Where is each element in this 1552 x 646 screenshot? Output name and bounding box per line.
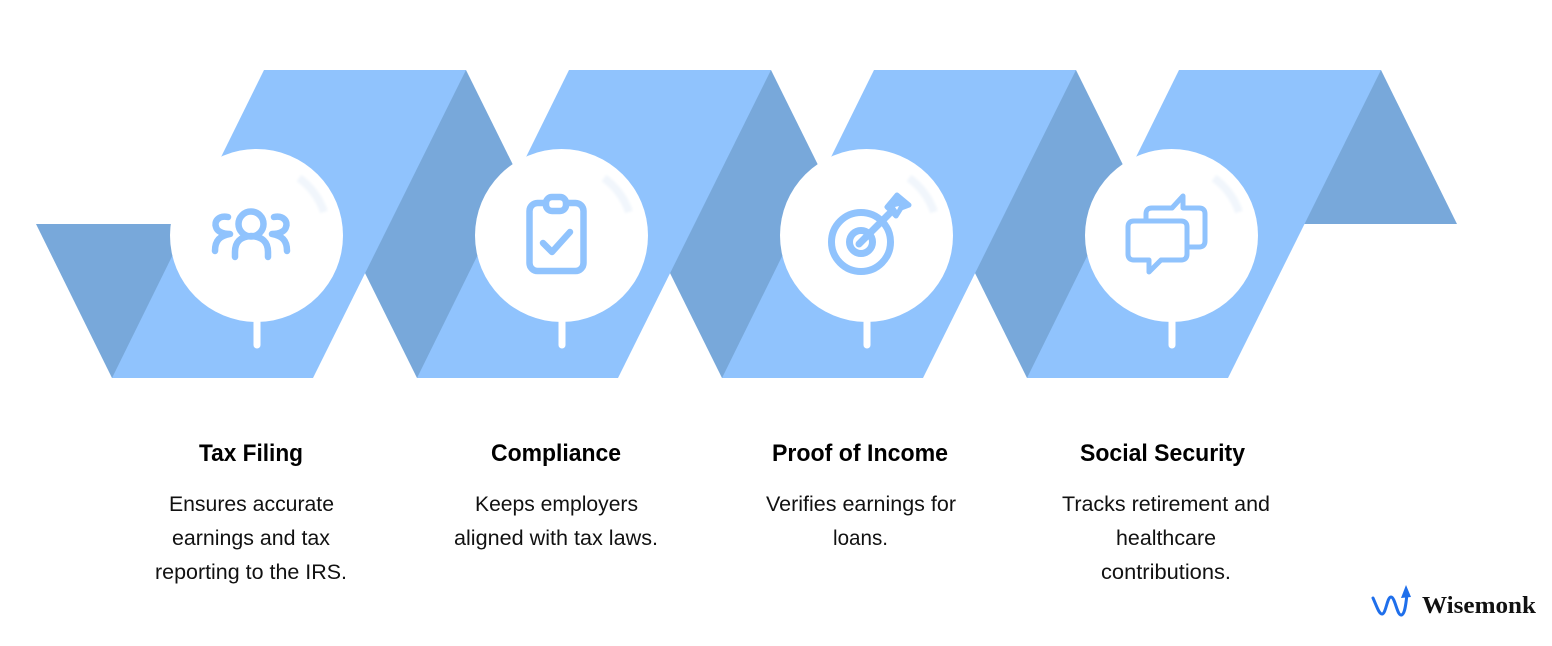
description: Tracks retirement and xyxy=(1062,493,1270,516)
circle badge xyxy=(780,149,953,322)
ribbon light segment 3 xyxy=(722,70,1076,378)
description: earnings and tax xyxy=(172,527,331,550)
stem xyxy=(864,322,870,345)
ribbon dark fold 3 xyxy=(970,70,1128,378)
icon: clipboard with check xyxy=(530,197,584,271)
ribbon dark fold 2 xyxy=(665,70,823,378)
description: Keeps employers xyxy=(475,493,638,516)
ribbon light segment 1 xyxy=(112,70,466,378)
description: reporting to the IRS. xyxy=(155,561,347,584)
stem xyxy=(1168,322,1176,345)
heading: Proof of Income xyxy=(772,440,948,467)
wordmark: Wisemonk xyxy=(1422,593,1537,619)
description: Ensures accurate xyxy=(169,493,334,516)
stem xyxy=(558,322,566,345)
icon: rising wave arrow xyxy=(1373,585,1411,615)
description: healthcare xyxy=(1116,527,1216,550)
highlight arc xyxy=(909,178,934,212)
logo: Wisemonk xyxy=(1373,585,1537,619)
panel: compliance xyxy=(454,149,658,550)
circle badge xyxy=(1085,149,1258,322)
icon: speech bubbles xyxy=(1128,196,1205,272)
description xyxy=(1062,493,1270,584)
description: Verifies earnings for xyxy=(766,493,956,516)
panel: tax filing xyxy=(155,149,347,584)
heading: Tax Filing xyxy=(199,440,303,467)
description xyxy=(155,493,347,584)
circle badge xyxy=(170,149,343,322)
heading: Social Security xyxy=(1080,440,1246,467)
zigzag ribbon background xyxy=(36,70,1457,378)
description: contributions. xyxy=(1101,561,1231,584)
circle badge xyxy=(475,149,648,322)
panel: social security xyxy=(1062,149,1270,584)
ribbon light segment 2 xyxy=(417,70,771,378)
icon: people group xyxy=(215,212,287,257)
highlight arc xyxy=(1214,178,1239,212)
description xyxy=(454,493,658,550)
panel: proof of income xyxy=(766,149,956,550)
description: loans. xyxy=(833,527,888,550)
description xyxy=(766,493,956,550)
ribbon dark fold: left end xyxy=(36,224,200,378)
highlight arc xyxy=(299,178,324,212)
highlight arc xyxy=(604,178,629,212)
stem xyxy=(254,322,260,345)
icon: target with arrow xyxy=(832,195,909,272)
description: aligned with tax laws. xyxy=(454,527,658,550)
ribbon light segment 4 xyxy=(1027,70,1381,378)
ribbon dark fold: right end xyxy=(1298,70,1457,224)
ribbon dark fold 1 xyxy=(360,70,518,378)
heading: Compliance xyxy=(491,440,621,467)
